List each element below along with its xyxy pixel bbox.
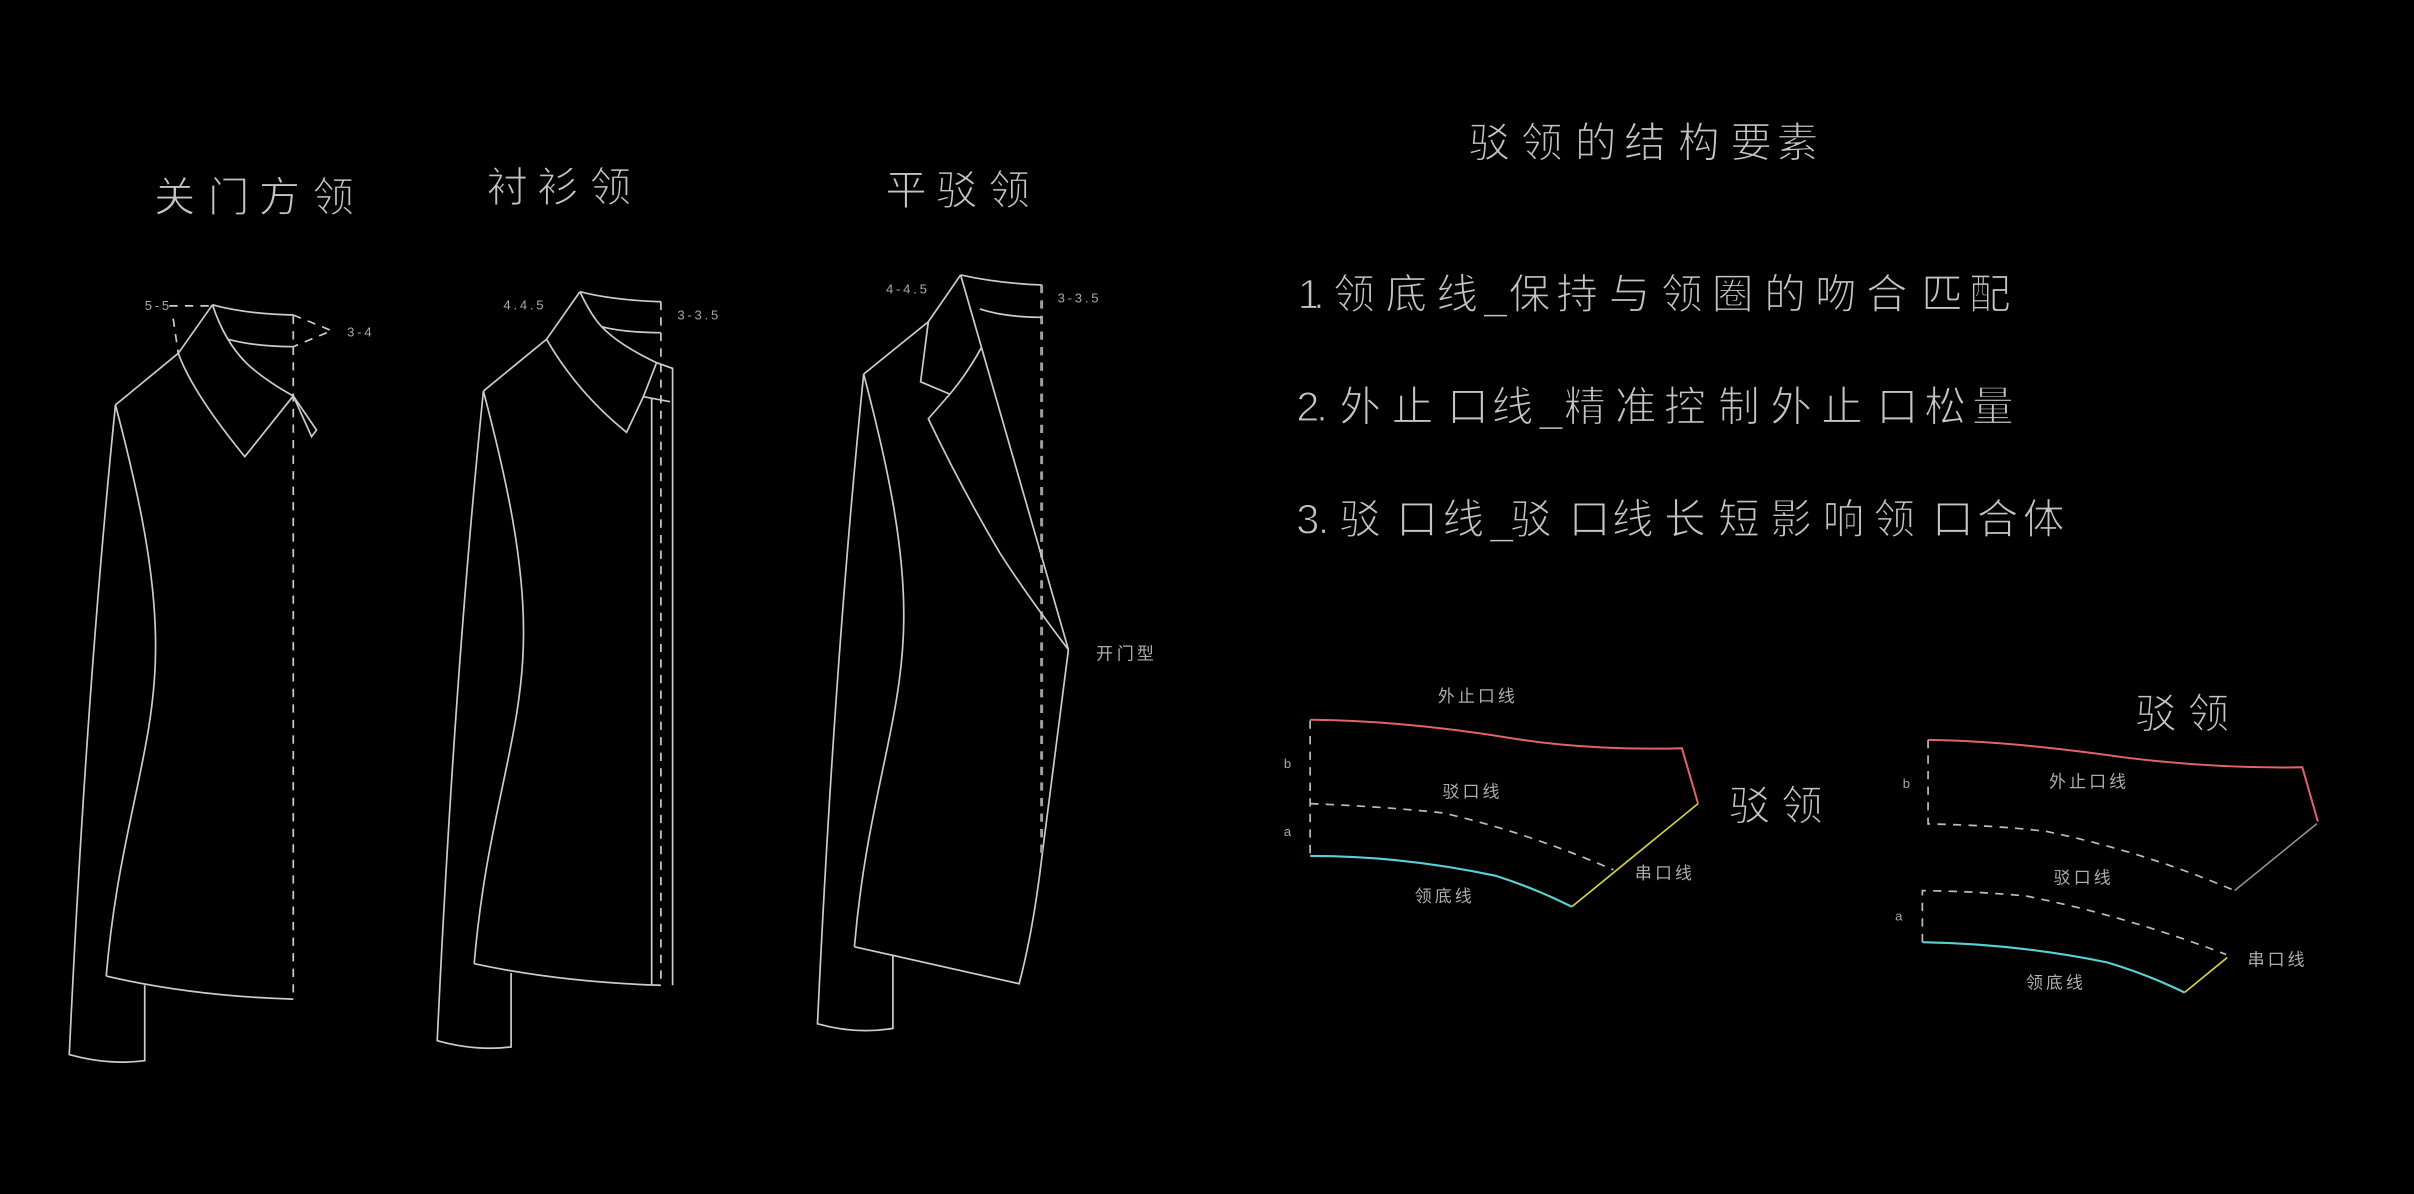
- shoulder line: [115, 305, 212, 405]
- outer edge line: [1928, 740, 2318, 822]
- label: 5-5: 5-5: [145, 298, 172, 313]
- armhole and side seam: [106, 405, 156, 976]
- label: 3-3.5: 3-3.5: [677, 307, 721, 322]
- hem and front edge: [854, 650, 1068, 984]
- label: gorge line: 串口线: [1635, 864, 1692, 883]
- armhole and side seam: [474, 391, 524, 964]
- centre front dashed line: [292, 316, 294, 999]
- label: b: b: [1284, 756, 1294, 771]
- label: neck base line: 领底线: [1415, 887, 1472, 906]
- label: b: b: [1903, 776, 1913, 791]
- roll line dashed: [1310, 804, 1613, 870]
- point 3: 3.驳口线_驳口线长短影响领口合体: [1296, 495, 2064, 542]
- diagram: lapel collar separated: [1895, 690, 2318, 993]
- roll line dashed upper: [1928, 740, 2235, 891]
- panel: closed square collar: [69, 174, 374, 1062]
- label: roll line: 驳口线: [1443, 782, 1500, 801]
- neck base line: [1310, 856, 1572, 907]
- text block: structure points: [1296, 271, 2064, 542]
- collar: [178, 305, 293, 457]
- label: gorge line: 串口线: [2248, 950, 2305, 969]
- label: 4.4.5: 4.4.5: [503, 297, 546, 312]
- label: open type: 开门型: [1096, 645, 1154, 664]
- label: outer edge line: 外止口线: [2049, 772, 2126, 791]
- centre front dashed line: [660, 302, 662, 985]
- heading: notched lapel collar: 平驳领: [885, 167, 1030, 214]
- roll line dashed lower: [1922, 891, 2226, 954]
- gorge line upper: [2235, 824, 2317, 891]
- roll line: [961, 275, 1068, 650]
- centre back dashed: [1309, 720, 1311, 856]
- label: 3-3.5: 3-3.5: [1058, 291, 1101, 306]
- panel: notched lapel collar: [817, 167, 1154, 1031]
- diagram: lapel collar one piece: [1284, 687, 1823, 907]
- neck base line: [1922, 942, 2185, 993]
- gorge line: [1572, 804, 1698, 907]
- hem: [106, 976, 293, 999]
- centre front dashed line: [1041, 285, 1043, 854]
- armhole and side seam: [854, 374, 904, 947]
- collar: [547, 292, 661, 432]
- heading: lapel collar: 驳领: [2135, 690, 2229, 737]
- gorge line lower: [2185, 958, 2227, 993]
- label: 3-4: 3-4: [347, 324, 374, 339]
- collar stand lines: [961, 275, 1042, 317]
- heading: shirt collar: 衬衫领: [486, 164, 631, 211]
- collar measure dashes: [169, 306, 332, 353]
- point 2: 2.外止口线_精准控制外止口松量: [1296, 383, 2014, 430]
- button stand: [643, 363, 673, 985]
- sleeve outline: [69, 405, 145, 1062]
- point 1: 1.领底线_保持与领圈的吻合匹配: [1298, 271, 2011, 318]
- label: neck base line: 领底线: [2026, 973, 2083, 992]
- heading: lapel collar: 驳领: [1729, 782, 1823, 829]
- label: outer edge line: 外止口线: [1438, 687, 1515, 706]
- outer edge line: [1310, 720, 1698, 804]
- collar tab: [293, 396, 317, 437]
- sleeve outline: [817, 374, 893, 1031]
- label: a: a: [1895, 909, 1905, 924]
- hem: [474, 964, 661, 985]
- shoulder line: [483, 292, 580, 391]
- panel: shirt collar: [437, 164, 721, 1048]
- collar and lapel: [921, 322, 1068, 650]
- sleeve outline: [437, 391, 511, 1048]
- label: roll line: 驳口线: [2054, 869, 2111, 888]
- shoulder line: [864, 275, 961, 374]
- label: 4-4.5: 4-4.5: [886, 281, 930, 296]
- label: a: a: [1284, 824, 1294, 839]
- heading: closed square collar: 关门方领: [154, 174, 354, 221]
- main title: 驳领的结构要素: [1469, 119, 1818, 166]
